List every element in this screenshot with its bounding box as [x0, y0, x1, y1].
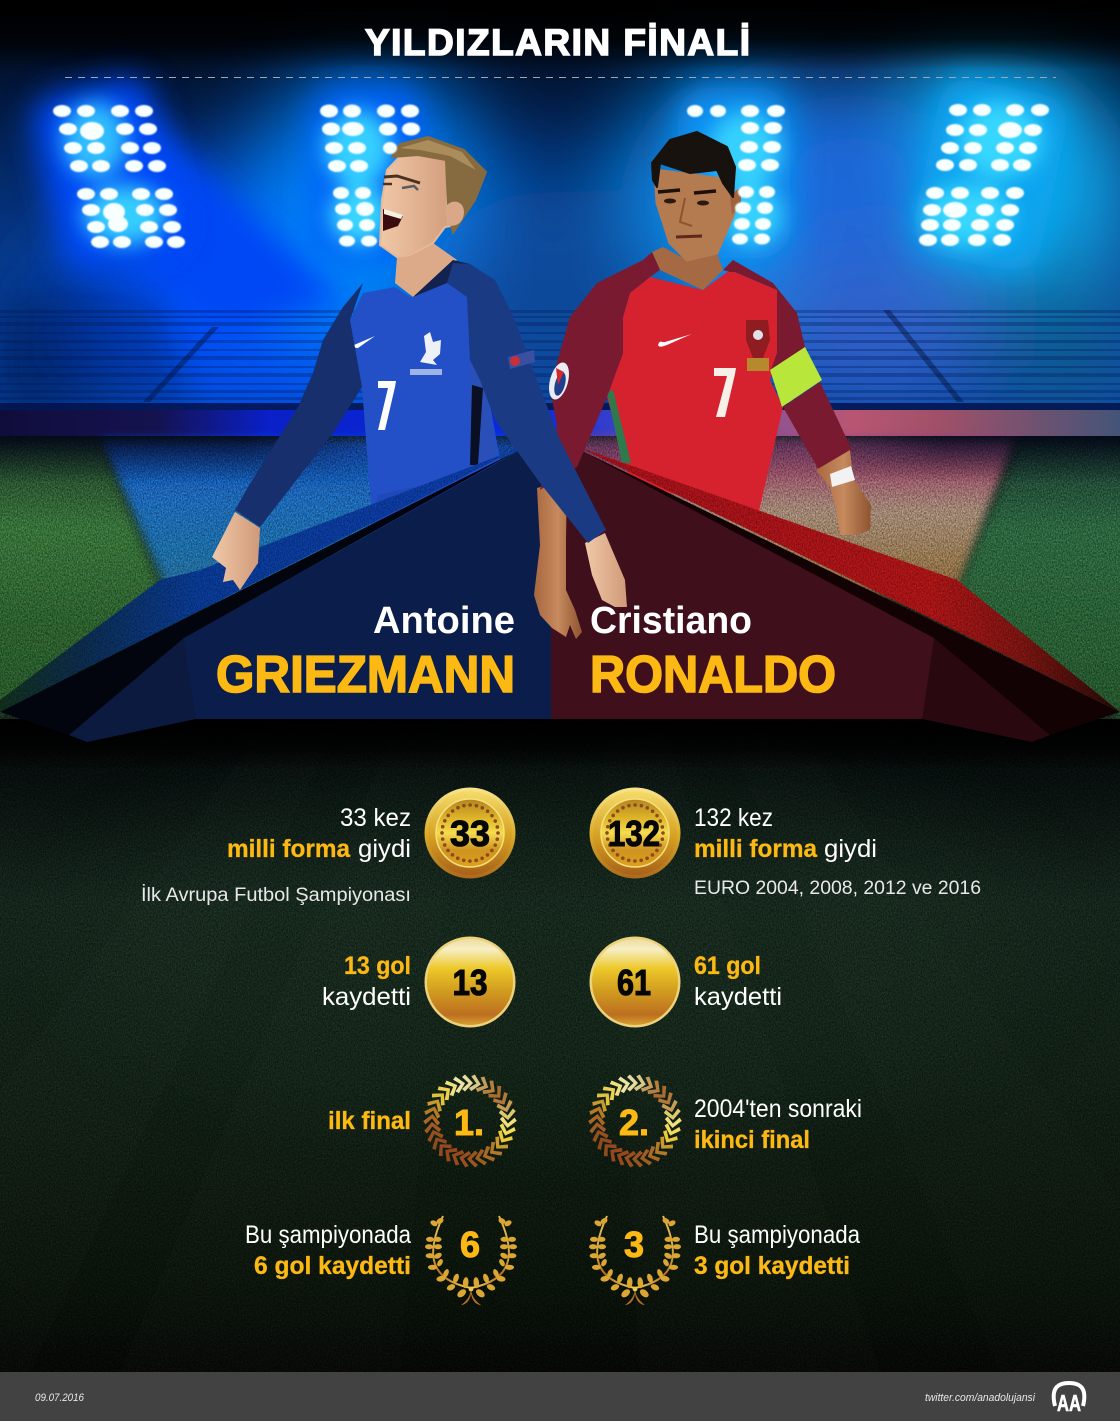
medal: 61: 61	[617, 962, 651, 1003]
euro patch	[545, 360, 573, 402]
stadium background	[0, 0, 1120, 440]
stat text: Ronaldo goals: 61 gol	[694, 952, 761, 980]
title: YILDIZLARIN FİNALİ	[365, 22, 750, 63]
stat text: Griezmann tournament goals: Bu şampiyonada	[245, 1221, 411, 1249]
name: Antoine Griezmann: Antoine	[373, 600, 515, 642]
Ronaldo left arm and hand	[534, 260, 650, 639]
stat text: Griezmann caps: İlk Avrupa Futbol Şampiyonası	[141, 885, 411, 906]
Griezmann left arm and hand	[212, 283, 363, 590]
Griezmann head	[380, 137, 486, 297]
laurel: 3: 3	[624, 1224, 644, 1265]
ear	[445, 202, 464, 226]
name: Antoine Griezmann	[216, 600, 515, 704]
laurel: 3	[589, 1216, 681, 1305]
stat text: Ronaldo tournament goals: Bu şampiyonada	[694, 1221, 860, 1249]
medal: 33: 33	[450, 813, 490, 854]
stadium stands	[0, 285, 1120, 438]
panel side: left dark	[0, 451, 517, 735]
medal: 132: 132	[608, 813, 660, 854]
Ronaldo right arm and hand	[730, 260, 871, 535]
number 7	[378, 381, 396, 430]
medal: 13: 13	[452, 962, 488, 1003]
stat text: Griezmann goals: kaydetti	[322, 983, 411, 1011]
Griezmann right arm and hand	[447, 263, 627, 607]
stat text: Griezmann caps: milli forma	[227, 835, 351, 863]
wreath: 2.	[588, 1074, 682, 1168]
stat text: Ronaldo caps: EURO 2004, 2008, 2012 ve 2016	[694, 878, 981, 899]
upper pitch	[0, 436, 1120, 726]
crest	[746, 320, 770, 358]
stat text: second final: ikinci final	[694, 1126, 810, 1154]
twitter handle: twitter.com/anadolujansi	[925, 1392, 1036, 1404]
light beam from first tower	[80, 120, 340, 330]
swoosh	[354, 336, 375, 348]
captain armband	[770, 347, 822, 407]
name: Antoine Griezmann: GRIEZMANN	[216, 646, 515, 704]
stat text: Griezmann tournament goals	[245, 1221, 411, 1280]
footer bar	[0, 1372, 1120, 1421]
uefa patch	[508, 350, 535, 369]
medal: 61	[590, 936, 680, 1028]
name: Cristiano Ronaldo: RONALDO	[590, 646, 836, 704]
dashed divider	[65, 76, 1056, 78]
panel flap: right	[922, 638, 1050, 742]
panel side: right dark	[578, 449, 1120, 735]
date: 09.07.2016	[35, 1392, 85, 1404]
panel: Griezmann navy	[184, 445, 551, 719]
AA logo: AA	[1057, 1390, 1081, 1416]
stat text: Griezmann caps: giydi	[358, 835, 411, 863]
wreath: 1.	[423, 1074, 517, 1168]
number 7	[714, 368, 736, 417]
stat text: Griezmann goals	[322, 952, 411, 1011]
Griezmann torso	[350, 283, 505, 530]
medal: 13	[424, 936, 516, 1028]
stat text: Ronaldo caps: milli forma	[694, 835, 818, 863]
medal: 132	[590, 788, 680, 878]
name: Cristiano Ronaldo	[590, 600, 836, 704]
panel: Ronaldo maroon	[551, 445, 934, 719]
wreath: 2.: 2.	[619, 1102, 649, 1143]
stat text: second final	[694, 1095, 862, 1154]
medal: 33	[424, 788, 516, 878]
stat text: Griezmann tournament goals: 6 gol kaydetti	[254, 1252, 411, 1280]
Ronaldo head	[643, 132, 741, 290]
name: Cristiano Ronaldo: Cristiano	[590, 600, 752, 642]
stat text: first final: ilk final	[328, 1107, 411, 1135]
stat text: Griezmann caps	[141, 804, 411, 906]
AA logo	[1054, 1383, 1084, 1416]
wristband	[830, 466, 855, 487]
panel flap: left	[69, 638, 196, 742]
stat text: second final: 2004'ten sonraki	[694, 1095, 862, 1123]
stat text: Ronaldo tournament goals: 3 gol kaydetti	[694, 1252, 850, 1280]
lower pitch	[0, 719, 1120, 1372]
crest caption	[410, 369, 442, 375]
stat text: Ronaldo caps: giydi	[824, 835, 877, 863]
swoosh	[658, 334, 692, 347]
rooster crest	[420, 332, 441, 365]
stat text: Ronaldo goals: kaydetti	[694, 983, 782, 1011]
ribbon bands	[0, 449, 1120, 712]
stat text: Griezmann goals: 13 gol	[344, 952, 411, 980]
laurel: 6: 6	[460, 1224, 480, 1265]
laurel: 6	[425, 1216, 517, 1305]
stat text: Ronaldo goals	[694, 952, 782, 1011]
stat text: Griezmann caps: 33 kez	[340, 804, 411, 832]
wreath: 1.: 1.	[454, 1102, 484, 1143]
stat text: Ronaldo tournament goals	[694, 1221, 860, 1280]
stat text: Ronaldo caps	[694, 804, 981, 899]
stat text: Ronaldo caps: 132 kez	[694, 804, 773, 832]
stadium floodlights	[53, 104, 1049, 248]
Ronaldo torso	[607, 270, 783, 520]
